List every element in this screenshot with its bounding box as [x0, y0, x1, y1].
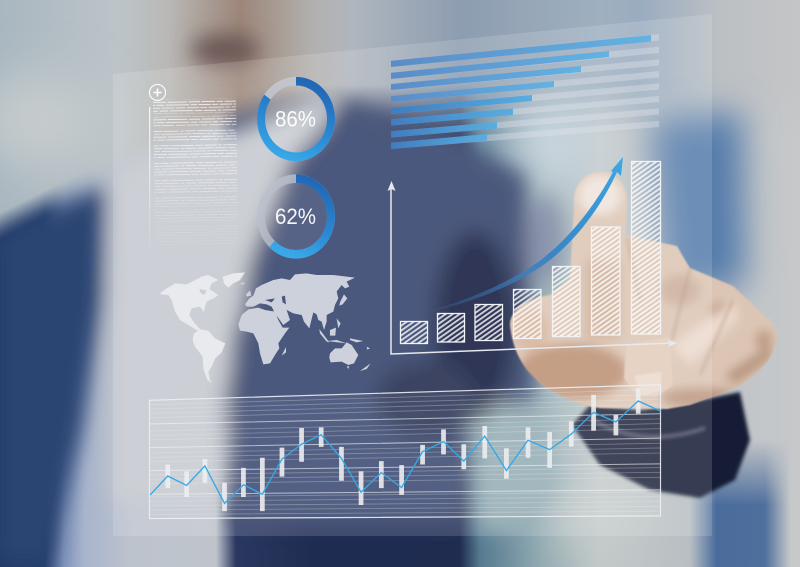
text block: [149, 98, 238, 235]
candles: [168, 388, 638, 511]
candlestick line chart: [149, 385, 661, 519]
plus icon: [150, 84, 166, 100]
sleeve of the suit: [572, 392, 750, 498]
label 86%: 86%: [275, 107, 316, 132]
axis arrowheads: [388, 181, 677, 347]
growth arrow: [423, 157, 623, 313]
horizontal progress bars: [391, 34, 659, 149]
grid lines: [149, 389, 661, 515]
donut 86%: [261, 81, 331, 157]
donut 62%: [261, 179, 331, 254]
finger creases: [627, 238, 733, 375]
shirt cuff: [590, 418, 705, 437]
axes: [391, 187, 672, 354]
trend line: [150, 401, 661, 503]
transparent screen panel: [113, 14, 712, 536]
bar chart with hatched bars: [388, 157, 677, 354]
label 62%: 62%: [275, 204, 316, 229]
hand pointing at the screen: [510, 172, 777, 409]
thumb: [624, 336, 673, 397]
chart frame: [149, 385, 661, 519]
hatched bars: [400, 162, 660, 344]
world map: [160, 272, 371, 383]
thumbnail: [634, 372, 661, 396]
